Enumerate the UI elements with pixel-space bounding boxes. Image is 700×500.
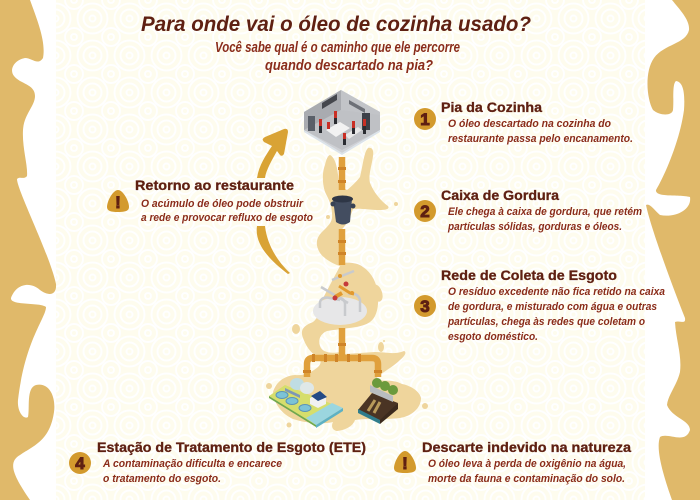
icon: warning: [394, 451, 416, 473]
title: Para onde vai o óleo de cozinha usado?: [141, 13, 531, 36]
oil spill flow: [266, 148, 428, 431]
left oil border: [0, 0, 56, 500]
step 2: Caixa de Gordura: partículas sólidas, gorduras e óleos.: [447, 221, 622, 233]
step 4: Estação de Tratamento de Esgoto: Estação de Tratamento de Esgoto (ETE): [97, 439, 366, 455]
step 4: Estação de Tratamento de Esgoto: o tratamento do esgoto.: [103, 473, 221, 485]
badge 3: [414, 295, 436, 317]
step 3: Rede de Coleta de Esgoto: Rede de Coleta de Esgoto: [441, 267, 617, 283]
badge 4: 4: [75, 454, 85, 473]
step 3: Rede de Coleta de Esgoto: O resíduo excedente não fica retido na caixa: [448, 286, 665, 298]
pipes: [303, 157, 382, 377]
badge 4: [69, 452, 91, 474]
step 1: Pia da Cozinha: Pia da Cozinha: [441, 99, 542, 115]
callout: Descarte indevido na natureza: morte da fauna e contaminação do solo.: [428, 473, 625, 485]
subtitle: [215, 39, 460, 74]
right oil border: [646, 0, 700, 500]
icon: warning: !: [402, 454, 408, 473]
icon: kitchen: [304, 90, 380, 155]
callout: Retorno ao restaurante: a rede e provocar refluxo de esgoto: [141, 212, 313, 224]
icon: contaminated soil: [358, 378, 398, 424]
step 4: Estação de Tratamento de Esgoto: A contaminação dificulta e encarece: [102, 458, 282, 470]
icon: grease trap: [330, 196, 356, 224]
subtitle: quando descartado na pia?: [265, 57, 433, 74]
subtitle: Você sabe qual é o caminho que ele percorre: [215, 39, 460, 56]
icon: warning: [107, 190, 129, 212]
badge 1: [414, 108, 436, 130]
icon: treatment station: [269, 378, 343, 428]
icon: sewer network: [313, 271, 367, 325]
step 3: Rede de Coleta de Esgoto: partículas, chega às redes que coletam o: [447, 316, 645, 328]
step 2: Caixa de Gordura: Ele chega à caixa de gordura, que retém: [448, 206, 642, 218]
step 2: Caixa de Gordura: Caixa de Gordura: [441, 187, 559, 203]
step 3: Rede de Coleta de Esgoto: de gordura, e misturado com água e outras: [448, 301, 657, 313]
badge 3: 3: [420, 297, 430, 316]
step 3: Rede de Coleta de Esgoto: esgoto doméstico.: [448, 331, 538, 343]
return arrow: [257, 129, 290, 274]
step 4: Estação de Tratamento de Esgoto: [69, 439, 366, 485]
callout: Retorno ao restaurante: [107, 177, 313, 224]
step 3: Rede de Coleta de Esgoto: [414, 267, 665, 343]
icon: warning: !: [115, 193, 121, 212]
callout: Descarte indevido na natureza: [394, 439, 631, 485]
badge 1: 1: [420, 110, 430, 129]
callout: Retorno ao restaurante: O acúmulo de óleo pode obstruir: [141, 198, 304, 210]
callout: Retorno ao restaurante: Retorno ao restaurante: [135, 177, 294, 193]
badge 2: 2: [420, 202, 430, 221]
callout: Descarte indevido na natureza: Descarte indevido na natureza: [422, 439, 631, 455]
step 2: Caixa de Gordura: [414, 187, 642, 233]
badge 2: [414, 200, 436, 222]
callout: Descarte indevido na natureza: O óleo leva à perda de oxigênio na água,: [428, 458, 626, 470]
step 1: Pia da Cozinha: [414, 99, 633, 145]
step 1: Pia da Cozinha: restaurante passa pelo encanamento.: [448, 133, 633, 145]
step 1: Pia da Cozinha: O óleo descartado na cozinha do: [448, 118, 611, 130]
